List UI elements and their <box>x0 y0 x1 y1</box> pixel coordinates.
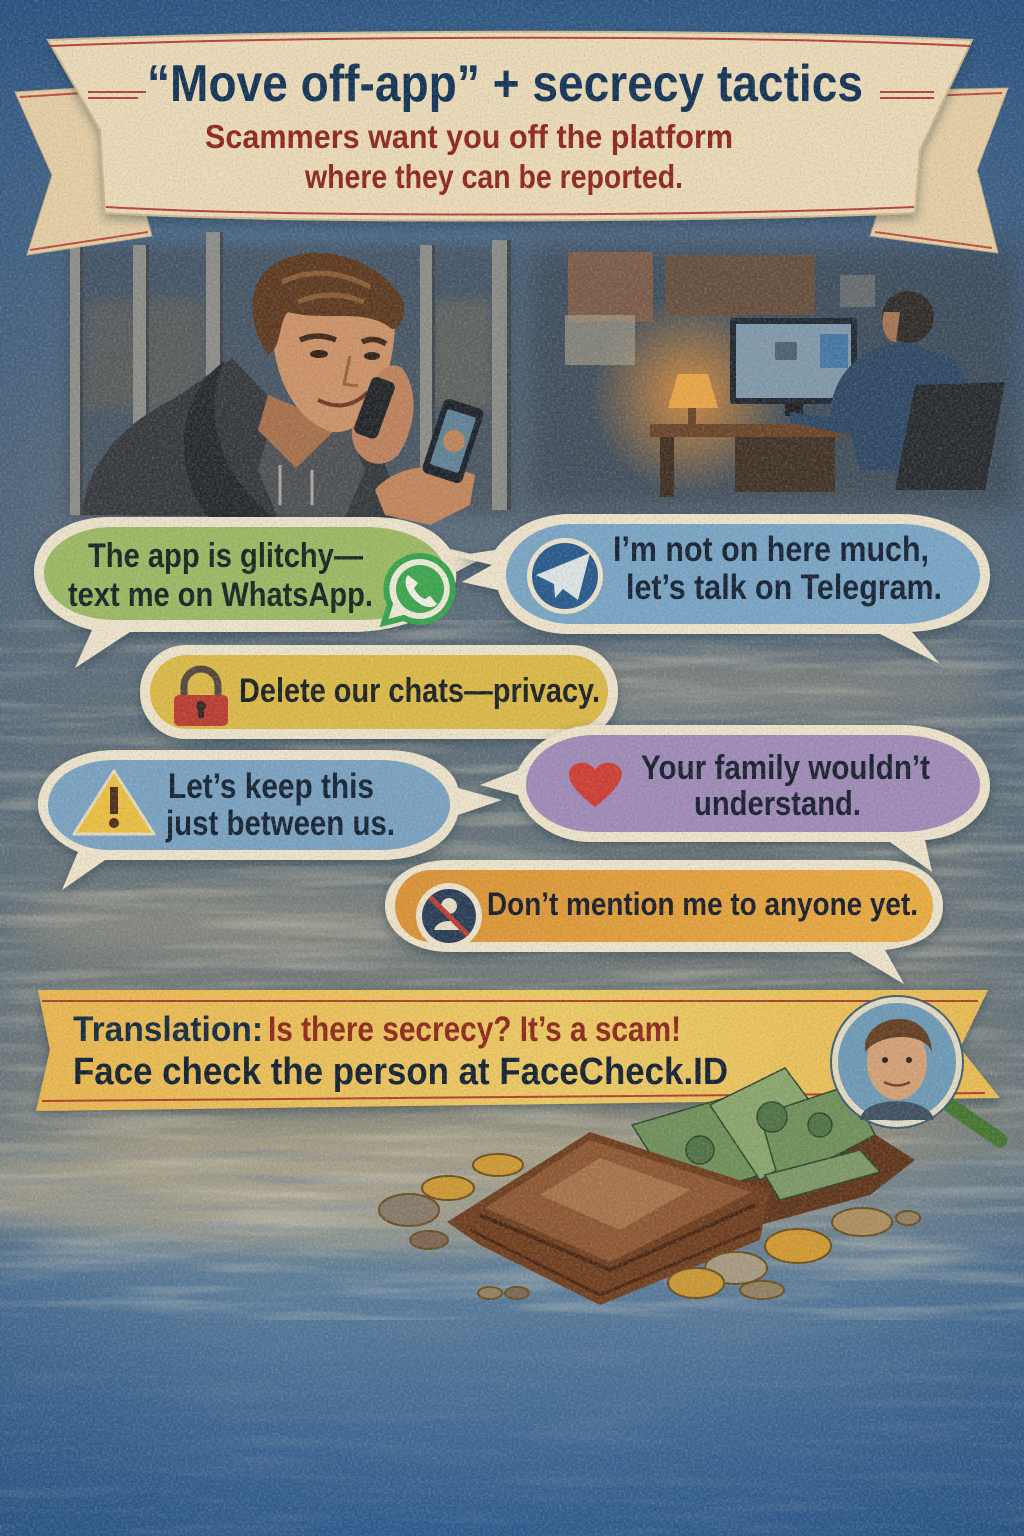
speech bubble: don't mention <box>385 860 943 984</box>
main banner <box>48 32 972 221</box>
speech bubble: delete chats <box>140 645 618 739</box>
translation banner <box>36 990 1000 1111</box>
wallet front <box>447 1132 770 1305</box>
speech bubble: family: understand. <box>694 785 861 823</box>
title text: “Move off-app” + secrecy tactics <box>147 55 863 113</box>
left ribbon tail <box>15 86 152 255</box>
speech bubble: Telegram: I’m not on here much, <box>613 530 929 569</box>
icon: WhatsApp <box>384 556 453 623</box>
neck and face <box>258 395 340 468</box>
hand to ear and phone <box>352 365 414 464</box>
chair <box>895 382 1005 490</box>
icon: magnifying glass with face <box>831 996 1000 1140</box>
wallet back <box>660 1115 915 1225</box>
subtitle: where they can be reported. <box>304 158 683 195</box>
speech bubble: WhatsApp <box>34 517 485 668</box>
banknotes <box>632 1068 880 1200</box>
speech bubble: keep between us: Let’s keep this <box>168 767 374 806</box>
speech bubble: keep between us: just between us. <box>165 804 395 843</box>
title banner <box>15 32 1008 255</box>
speech bubble: delete chats: Delete our chats—privacy. <box>239 672 600 710</box>
translation banner: Translation: <box>73 1010 263 1049</box>
icon: no-mention <box>416 883 482 949</box>
translation banner: Is there secrecy? It’s a scam! <box>268 1010 681 1049</box>
icon: heart <box>569 763 622 807</box>
illustration: man on phone behind bars <box>65 232 515 525</box>
illustration: scammer at desk <box>525 245 1020 510</box>
speech bubble: family: Your family wouldn’t <box>641 749 930 787</box>
illustration: wallet with cash and coins <box>379 1068 920 1305</box>
subtitle <box>205 118 733 195</box>
jail bars <box>70 232 511 517</box>
icon: padlock <box>174 669 228 726</box>
desk <box>650 424 855 437</box>
subtitle: Scammers want you off the platform <box>205 118 733 155</box>
monitor <box>730 318 857 404</box>
person <box>830 342 975 470</box>
speech bubble: family <box>480 725 990 872</box>
speech bubble: keep between us <box>38 750 502 890</box>
right ribbon tail <box>870 88 1008 253</box>
coins <box>379 1154 920 1299</box>
lamp <box>668 374 718 408</box>
cell backdrop <box>65 245 515 515</box>
speech bubble: Telegram <box>455 514 990 664</box>
speech bubble: WhatsApp: The app is glitchy— <box>88 537 363 575</box>
hair <box>252 253 404 355</box>
speech bubble: Telegram: let’s talk on Telegram. <box>626 568 942 607</box>
speech bubble: don't mention: Don’t mention me to anyone yet. <box>487 886 918 922</box>
translation banner: Face check the person at FaceCheck.ID <box>73 1051 728 1093</box>
speech bubble: WhatsApp: text me on WhatsApp. <box>68 576 373 614</box>
icon: warning triangle <box>74 771 154 834</box>
icon: Telegram <box>527 538 603 614</box>
hoodie <box>82 358 400 518</box>
hand with smartphone <box>375 467 475 525</box>
title rules <box>88 92 934 98</box>
